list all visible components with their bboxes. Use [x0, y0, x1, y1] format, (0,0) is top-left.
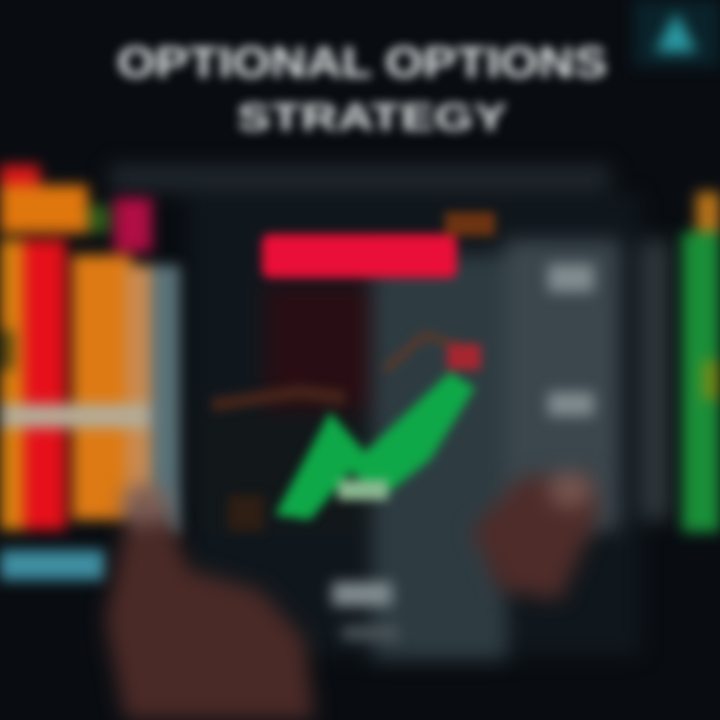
right panel: green chart column: [682, 192, 720, 532]
chart: green line: [212, 335, 481, 531]
left panel: red and orange chart columns: [0, 165, 180, 580]
icon: right hand: [472, 472, 600, 600]
text block: dashboard labels: [332, 264, 594, 640]
panel: central dashboard: [110, 165, 670, 660]
icon: logo badge: [634, 0, 720, 66]
title: OPTIONAL OPTIONS: [117, 38, 607, 87]
title: STRATEGY: [237, 97, 507, 139]
callout: red banner: [262, 212, 495, 278]
title: [117, 38, 607, 139]
icon: left hand: [105, 485, 315, 720]
